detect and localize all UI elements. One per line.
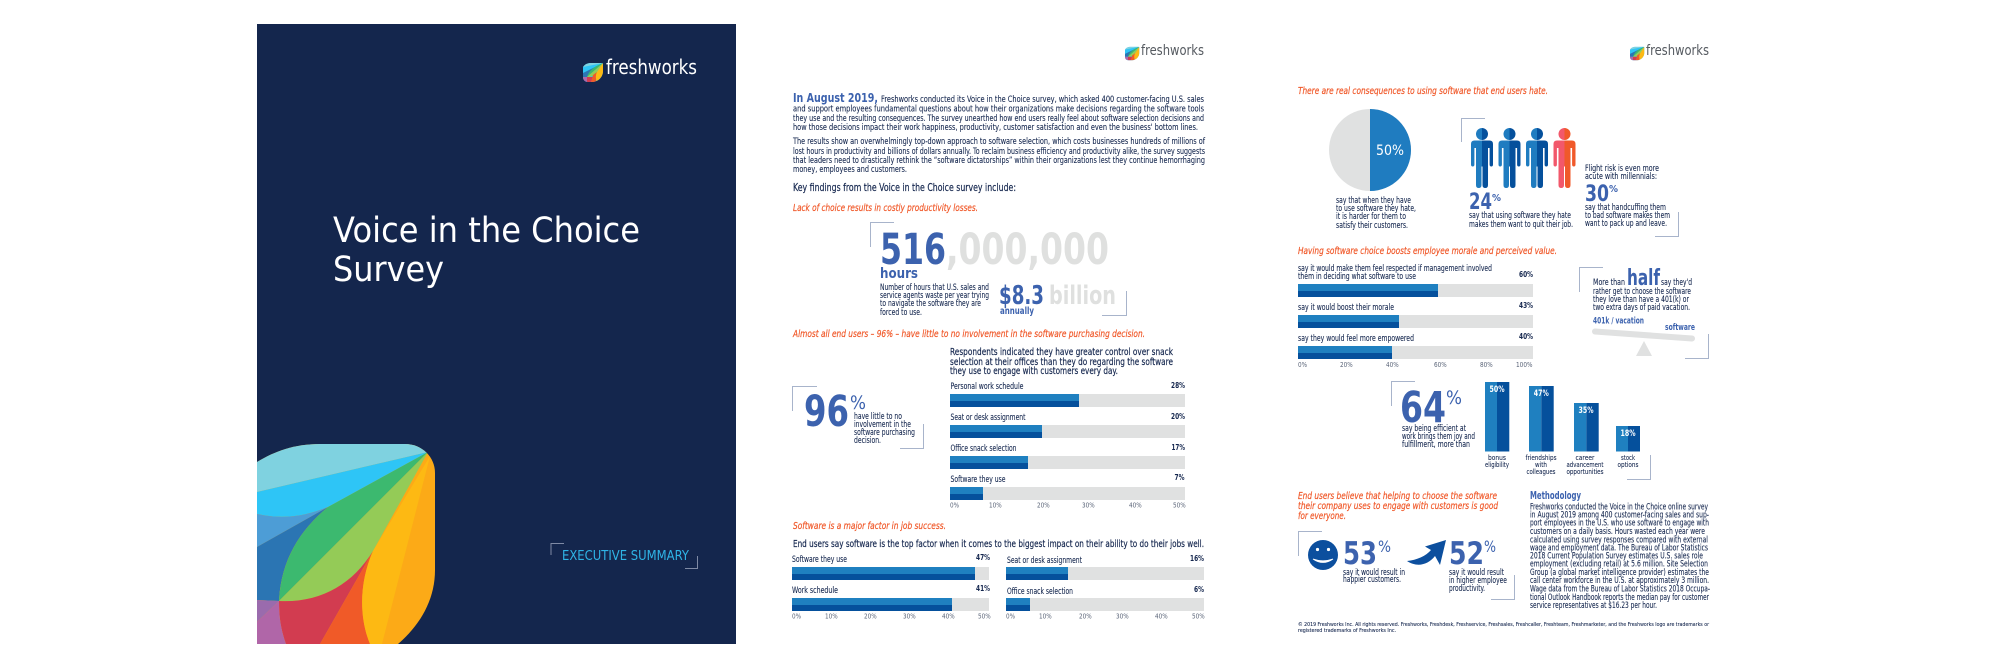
column chart: joy factors: options <box>1618 460 1639 469</box>
bar chart: job factors left: Work schedule <box>792 585 838 595</box>
stat: 24%: 24 <box>1469 189 1492 215</box>
column chart: joy factors: bonus <box>1488 453 1506 462</box>
bar chart: control: 20% <box>1171 411 1185 421</box>
column chart: joy factors: friendships <box>1526 453 1557 462</box>
copyright footer <box>1298 621 1710 634</box>
icon: freshworks logo page 3 <box>1630 46 1644 60</box>
bar chart: job factors right: 6% <box>1194 584 1204 594</box>
methodology block: service representatives at $16.23 per hour. <box>1530 601 1657 611</box>
intro paragraph: In August 2019, <box>793 91 878 105</box>
stat: 64% <box>1392 382 1475 450</box>
stat: 516,000,000 hours: 516 <box>880 226 946 275</box>
stat: 24%: % <box>1492 193 1501 204</box>
bar chart: job factors left: Software they use <box>792 554 847 564</box>
methodology block: Wage data from the Bureau of Labor Statistics 2018 Occupa- <box>1530 584 1710 594</box>
stat: 52% <box>1449 536 1514 600</box>
icon: smiley face <box>1298 532 1338 570</box>
bar chart: job factors right: Seat or desk assignment <box>1007 555 1083 565</box>
bar chart: morale: 43% <box>1519 300 1533 310</box>
bar chart: control: Seat or desk assignment <box>950 412 1026 422</box>
stat: 96%: software purchasing <box>854 428 915 438</box>
respondents text: selection at their offices than they do regarding the software <box>950 357 1173 368</box>
bar chart: control: 50% <box>1173 500 1186 510</box>
logo wordmark page 2: freshworks <box>1141 43 1204 59</box>
bar chart: control: Personal work schedule <box>950 381 1024 391</box>
section heading: good for everyone <box>1298 491 1498 522</box>
bar chart: morale: 80% <box>1480 360 1493 369</box>
bar chart: control <box>950 380 1186 510</box>
stat: 516,000,000 hours: service agents waste per year trying <box>880 291 989 301</box>
executive summary tag <box>551 544 698 568</box>
bar chart: job factors left: 47% <box>976 552 990 562</box>
methodology block: port employees in the U.S. who use software to engage with <box>1530 519 1709 529</box>
methodology block: tional Outlook Handbook reports the median pay for customer <box>1530 593 1709 603</box>
icon: freshworks logo page 2 <box>1125 46 1139 60</box>
bar chart: morale: 40% <box>1386 360 1399 369</box>
stat: 96%: decision. <box>854 436 881 446</box>
stat: 96%: have little to no <box>854 412 902 422</box>
stat: 516,000,000 hours: Number of hours that U.S. sales and <box>880 283 989 293</box>
methodology block: calculated using survey responses compared with external <box>1530 535 1708 545</box>
stat: 516,000,000 hours: hours <box>880 266 918 282</box>
stat: 53%: % <box>1378 537 1391 556</box>
bar chart: morale: say they would feel more empowered <box>1298 333 1414 343</box>
methodology block: customers on a daily basis. Hours wasted each year were <box>1530 527 1705 537</box>
callout: more than half: 401k / vacation <box>1593 316 1644 326</box>
bar chart: control: 7% <box>1174 472 1184 482</box>
panel: page 2 <box>792 43 1206 620</box>
bar chart: job factors right: 40% <box>1155 612 1168 620</box>
stat: 30% flight risk <box>1585 164 1678 236</box>
respondents text: they use to engage with customers every day. <box>950 366 1118 377</box>
bar chart: morale: say it would boost their morale <box>1298 302 1394 312</box>
cover title: Voice in the Choice <box>333 211 640 251</box>
stat: 52%: in higher employee <box>1449 576 1507 586</box>
section heading: involvement: Almost all end users – 96% – have little to no involvement in the software purchasing decision. <box>792 329 1145 340</box>
bar chart: control: 30% <box>1082 500 1095 510</box>
bar chart: job factors left: 0% <box>792 612 801 620</box>
copyright footer: registered trademarks of Freshworks Inc. <box>1298 628 1396 634</box>
methodology block: Group (a global market intelligence provider) estimates the <box>1530 568 1709 578</box>
stat: 24%: say that using software they hate <box>1469 211 1571 221</box>
pie caption: say that when they have <box>1336 196 1411 206</box>
column chart: joy factors: opportunities <box>1566 467 1604 476</box>
key findings heading: Key findings from the Voice in the Choice survey include: <box>793 183 1016 194</box>
results paragraph: that leaders need to drastically rethink the “software dictatorships” within their organizations lest they continue hemorrhaging <box>793 155 1205 166</box>
bar chart: morale: say it would make them feel respected if management involved <box>1298 263 1492 273</box>
bar chart: job factors left: 10% <box>825 612 838 620</box>
bar chart: job factors left: 30% <box>903 612 916 620</box>
pie caption: to use software they hate, <box>1336 204 1416 214</box>
pie caption <box>1336 196 1416 231</box>
stat: 96%: involvement in the <box>854 420 911 430</box>
cover logo wordmark: freshworks <box>606 55 697 79</box>
bar chart: control: 10% <box>989 500 1002 510</box>
pie caption: it is harder for them to <box>1336 212 1406 222</box>
callout: more than half: More than <box>1593 278 1625 288</box>
column chart: joy factors: with <box>1535 460 1547 469</box>
stat: 53% <box>1343 536 1405 585</box>
intro paragraph: Freshworks conducted its Voice in the Choice survey, which asked 400 customer-facing U.S. sales <box>881 94 1204 105</box>
logo wordmark page 3: freshworks <box>1646 43 1709 59</box>
callout: more than half: two extra days of paid vacation. <box>1593 303 1690 313</box>
bar chart: morale <box>1298 263 1533 369</box>
cover title: Survey <box>333 250 444 290</box>
stat: 96% <box>792 386 924 448</box>
stat: 30% flight risk: acute with millennials: <box>1585 172 1657 182</box>
bar chart: job factors left: 50% <box>978 612 991 620</box>
column chart: joy factors: 47% <box>1534 388 1549 398</box>
callout: more than half: half <box>1627 266 1660 291</box>
bar chart: job factors right: 0% <box>1006 612 1015 620</box>
cover title <box>333 211 640 290</box>
bar chart: control: Office snack selection <box>950 443 1016 453</box>
bar chart: control: 20% <box>1037 500 1050 510</box>
stat: 52%: 52 <box>1449 536 1484 572</box>
section heading: consequences: There are real consequences to using software that end users hate. <box>1298 86 1548 97</box>
cover background <box>257 24 736 644</box>
callout: more than half: rather get to choose the software <box>1593 287 1691 297</box>
intro paragraph: and support employees fundamental questions about how their organizations make decisions regarding the software tools <box>793 104 1204 114</box>
stat: 30% flight risk: Flight risk is even more <box>1585 164 1659 174</box>
section heading: good for everyone: for everyone. <box>1298 511 1346 522</box>
callout: more than half <box>1580 266 1708 358</box>
bar chart: job factors left: 40% <box>942 612 955 620</box>
intro paragraph: they use and the resulting consequences. The survey unearthed how end users really feel about software selection decisions and <box>793 113 1204 124</box>
methodology block: employment (excluding retail) at 5.6 million. Site Selection <box>1530 560 1708 570</box>
stat: 52%: % <box>1484 537 1496 556</box>
intro paragraph: how those decisions impact their work happiness, productivity, customer satisfaction and even the business' bottom lines. <box>793 122 1198 133</box>
bar chart: control: 17% <box>1172 442 1185 452</box>
results paragraph: The results show an overwhelmingly top-down approach to software selection, which costs businesses hundreds of millions of <box>792 136 1206 147</box>
methodology block: in August 2019 among 400 customer-facing sales and sup- <box>1530 511 1709 521</box>
section heading: job success: Software is a major factor in job success. <box>793 521 946 532</box>
stat: 516,000,000 hours: to navigate the software they are <box>880 299 981 309</box>
panel: cover page <box>257 24 736 644</box>
bar chart: morale: them in deciding what software to use <box>1298 271 1416 281</box>
stat: 64%: % <box>1446 387 1462 409</box>
stat: 24%: makes them want to quit their job. <box>1469 220 1573 230</box>
stat: 96%: 96 <box>804 388 849 437</box>
bar chart: control: 0% <box>950 500 959 510</box>
callout: more than half: software <box>1665 323 1695 333</box>
column chart: joy factors <box>1485 382 1650 480</box>
section heading: good for everyone: End users believe that helping to choose the software <box>1298 491 1497 502</box>
bar chart: job factors right: 16% <box>1190 553 1204 563</box>
bar chart: job factors left: 20% <box>864 612 877 620</box>
methodology block: call center workforce in the U.S. at approximately 3 million. <box>1530 576 1709 586</box>
stat: 24% <box>1469 189 1573 230</box>
stat: 52%: say it would result <box>1449 568 1504 578</box>
bar chart: control: Software they use <box>950 474 1006 484</box>
column chart: joy factors: 35% <box>1578 405 1594 415</box>
stat: 516,000,000 hours <box>870 222 1109 318</box>
stat: 64%: say being efficient at <box>1402 424 1466 434</box>
stat: $8.3 billion annually <box>999 281 1126 317</box>
stat: $8.3 billion annually: $8.3 <box>999 281 1044 311</box>
bar chart: job factors right <box>1006 553 1205 620</box>
stat: 64%: fulfillment, more than <box>1402 440 1470 450</box>
methodology block <box>1530 491 1710 611</box>
stat: 53%: 53 <box>1343 536 1377 572</box>
stat: $8.3 billion annually: billion <box>1049 281 1116 311</box>
stat: 30% flight risk: % <box>1609 184 1618 195</box>
executive summary tag: EXECUTIVE SUMMARY <box>562 549 689 564</box>
bar chart: morale: 40% <box>1519 331 1533 341</box>
column chart: joy factors: eligibility <box>1485 460 1509 469</box>
icon: upward arrow <box>1407 540 1446 565</box>
stat: $8.3 billion annually: annually <box>1000 306 1034 317</box>
bar chart: morale: 60% <box>1434 360 1447 369</box>
column chart: joy factors: colleagues <box>1526 467 1556 476</box>
stat: 30% flight risk: 30 <box>1585 181 1609 207</box>
icon row: four people <box>1462 118 1576 188</box>
results paragraph <box>792 136 1206 175</box>
bar chart: job factors left <box>792 552 991 620</box>
stat: 64%: 64 <box>1400 384 1446 433</box>
bar chart: job factors right: 10% <box>1039 612 1052 620</box>
icon: multicolour leaf <box>257 444 435 644</box>
column chart: joy factors: 18% <box>1620 428 1636 438</box>
section heading: good for everyone: their company uses to engage with customers is good <box>1298 501 1498 512</box>
methodology block: Methodology <box>1530 491 1581 502</box>
callout: more than half: they love than have a 401(k) or <box>1593 295 1689 305</box>
respondents text <box>950 347 1173 377</box>
bar chart: job factors right: 50% <box>1192 612 1205 620</box>
stat: 96%: % <box>850 392 866 414</box>
bar chart: job factors right: Office snack selection <box>1007 586 1073 596</box>
stat: 30% flight risk: say that handcuffing them <box>1585 203 1666 213</box>
stat: 516,000,000 hours: ,000,000 <box>946 226 1109 275</box>
stat: 30% flight risk: want to pack up and leave. <box>1585 219 1667 229</box>
stat: 30% flight risk: to bad software makes them <box>1585 211 1670 221</box>
stat: 64%: work brings them joy and <box>1402 432 1475 442</box>
methodology block: wage and employment data. The Bureau of Labor Statistics <box>1530 543 1708 553</box>
bar chart: job factors left: 41% <box>976 583 990 593</box>
bar chart: morale: 100% <box>1516 360 1533 369</box>
icon: freshworks cover logo mark <box>583 62 603 82</box>
section heading: productivity losses: Lack of choice results in costly productivity losses. <box>793 203 978 214</box>
bar chart: morale: 60% <box>1519 269 1533 279</box>
column chart: joy factors: career <box>1576 453 1595 462</box>
bar chart: job factors right: 20% <box>1079 612 1092 620</box>
stat: 52%: productivity. <box>1449 584 1485 594</box>
stat: 53%: say it would result in <box>1343 568 1405 578</box>
bar chart: control: 40% <box>1129 500 1142 510</box>
pie chart: 50%: 50% <box>1376 143 1404 159</box>
pie chart: 50% <box>1329 109 1411 191</box>
section heading: morale: Having software choice boosts employee morale and perceived value. <box>1298 246 1557 257</box>
job success subheading: End users say software is the top factor when it comes to the biggest impact on their ability to do their jobs well. <box>793 539 1204 550</box>
bar chart: morale: 20% <box>1340 360 1353 369</box>
results paragraph: money, employees and customers. <box>793 164 907 175</box>
intro paragraph <box>793 91 1204 133</box>
pie caption: satisfy their customers. <box>1336 221 1408 231</box>
bar chart: morale: 0% <box>1298 360 1307 369</box>
stat: 516,000,000 hours: forced to use. <box>880 308 922 318</box>
respondents text: Respondents indicated they have greater control over snack <box>950 347 1173 358</box>
results paragraph: lost hours in productivity and billions of dollars annually. To reclaim business efficiency and productivity alike, the survey suggests <box>793 146 1205 157</box>
bar chart: job factors right: 30% <box>1116 612 1129 620</box>
callout: more than half: say they'd <box>1661 278 1692 288</box>
column chart: joy factors: 50% <box>1490 384 1505 394</box>
column chart: joy factors: advancement <box>1566 460 1604 469</box>
methodology block: Freshworks conducted the Voice in the Choice online survey <box>1530 502 1708 512</box>
copyright footer: © 2019 Freshworks Inc. All rights reserved. Freshworks, Freshdesk, Freshservice, Freshsales, Freshcaller, Freshteam, Freshmarketer, and the Freshworks logo are trademarks or <box>1298 621 1710 628</box>
bar chart: control: 28% <box>1171 380 1185 390</box>
stat: 53%: happier customers. <box>1343 575 1401 585</box>
panel: page 3 <box>1298 43 1710 634</box>
column chart: joy factors: stock <box>1621 453 1636 462</box>
methodology block: 2018 Current Population Survey estimates U.S. sales role <box>1530 552 1703 562</box>
